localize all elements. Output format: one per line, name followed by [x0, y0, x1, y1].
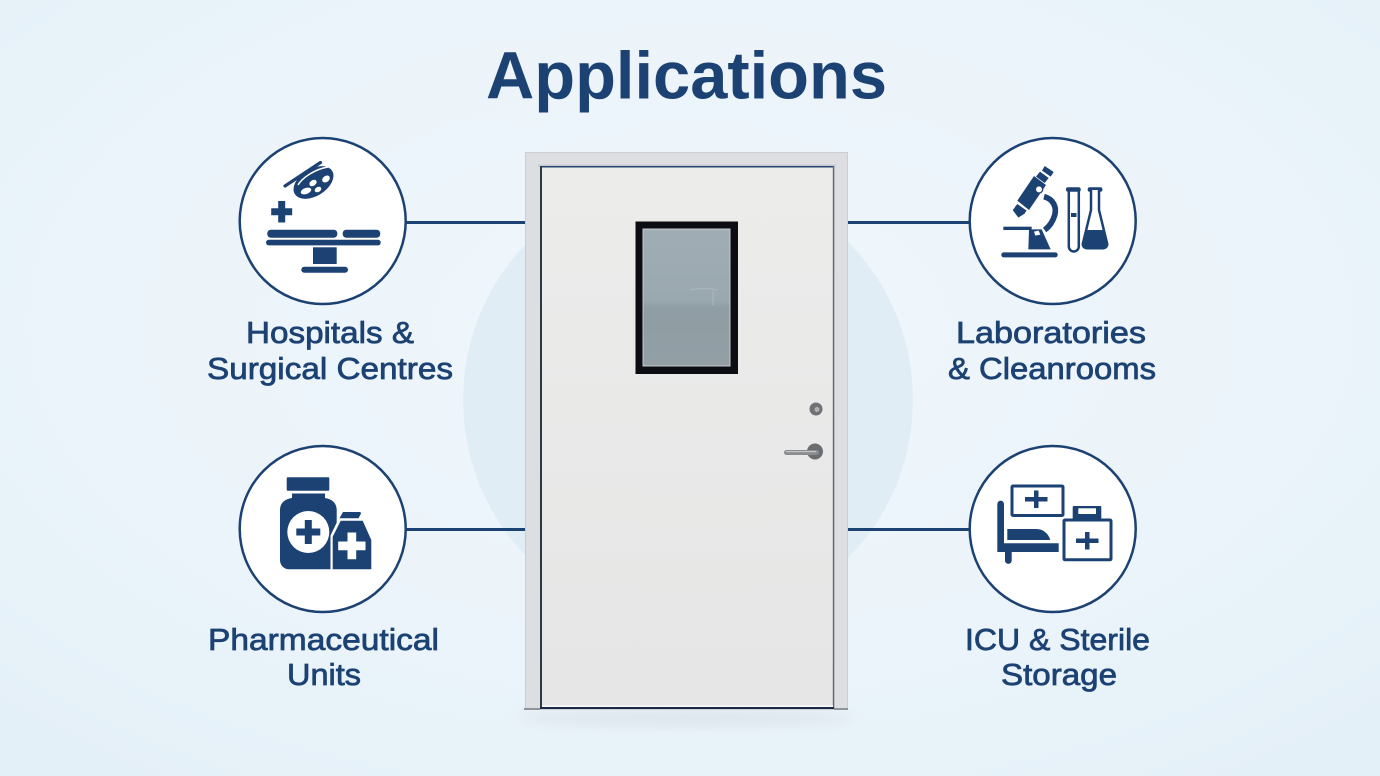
icon: microscope and flasks — [970, 138, 1136, 304]
label: pharmaceutical — [208, 622, 439, 692]
label: hospitals: Hospitals & — [246, 315, 414, 350]
door lock — [810, 402, 822, 416]
backdrop circle behind door — [463, 175, 913, 625]
label: pharmaceutical: Pharmaceutical — [208, 622, 439, 657]
label: icu: Storage — [1001, 657, 1117, 692]
icon: bed, monitor and medical kit — [970, 446, 1136, 612]
window — [636, 222, 738, 374]
icon: medicine bottles — [240, 446, 406, 612]
label: laboratories: Laboratories — [956, 315, 1146, 350]
connector lines — [406, 221, 970, 531]
label: hospitals: Surgical Centres — [207, 351, 453, 386]
door frame — [524, 152, 848, 710]
door assembly — [516, 152, 856, 724]
label: icu: ICU & Sterile — [965, 622, 1150, 657]
panel: hospitals — [207, 138, 453, 386]
door floor shadow — [516, 712, 856, 724]
label: hospitals — [207, 315, 453, 386]
door leaf — [540, 166, 834, 709]
panel: icu — [965, 446, 1150, 692]
label: icu — [965, 622, 1150, 692]
label: laboratories — [948, 315, 1156, 386]
panel: pharmaceutical — [208, 446, 439, 692]
label: pharmaceutical: Units — [287, 657, 361, 692]
panel: laboratories — [948, 138, 1156, 386]
label: laboratories: & Cleanrooms — [948, 351, 1156, 386]
icon: operating table and lamp — [240, 138, 406, 304]
door handle — [784, 444, 823, 460]
title: Applications — [486, 38, 887, 114]
